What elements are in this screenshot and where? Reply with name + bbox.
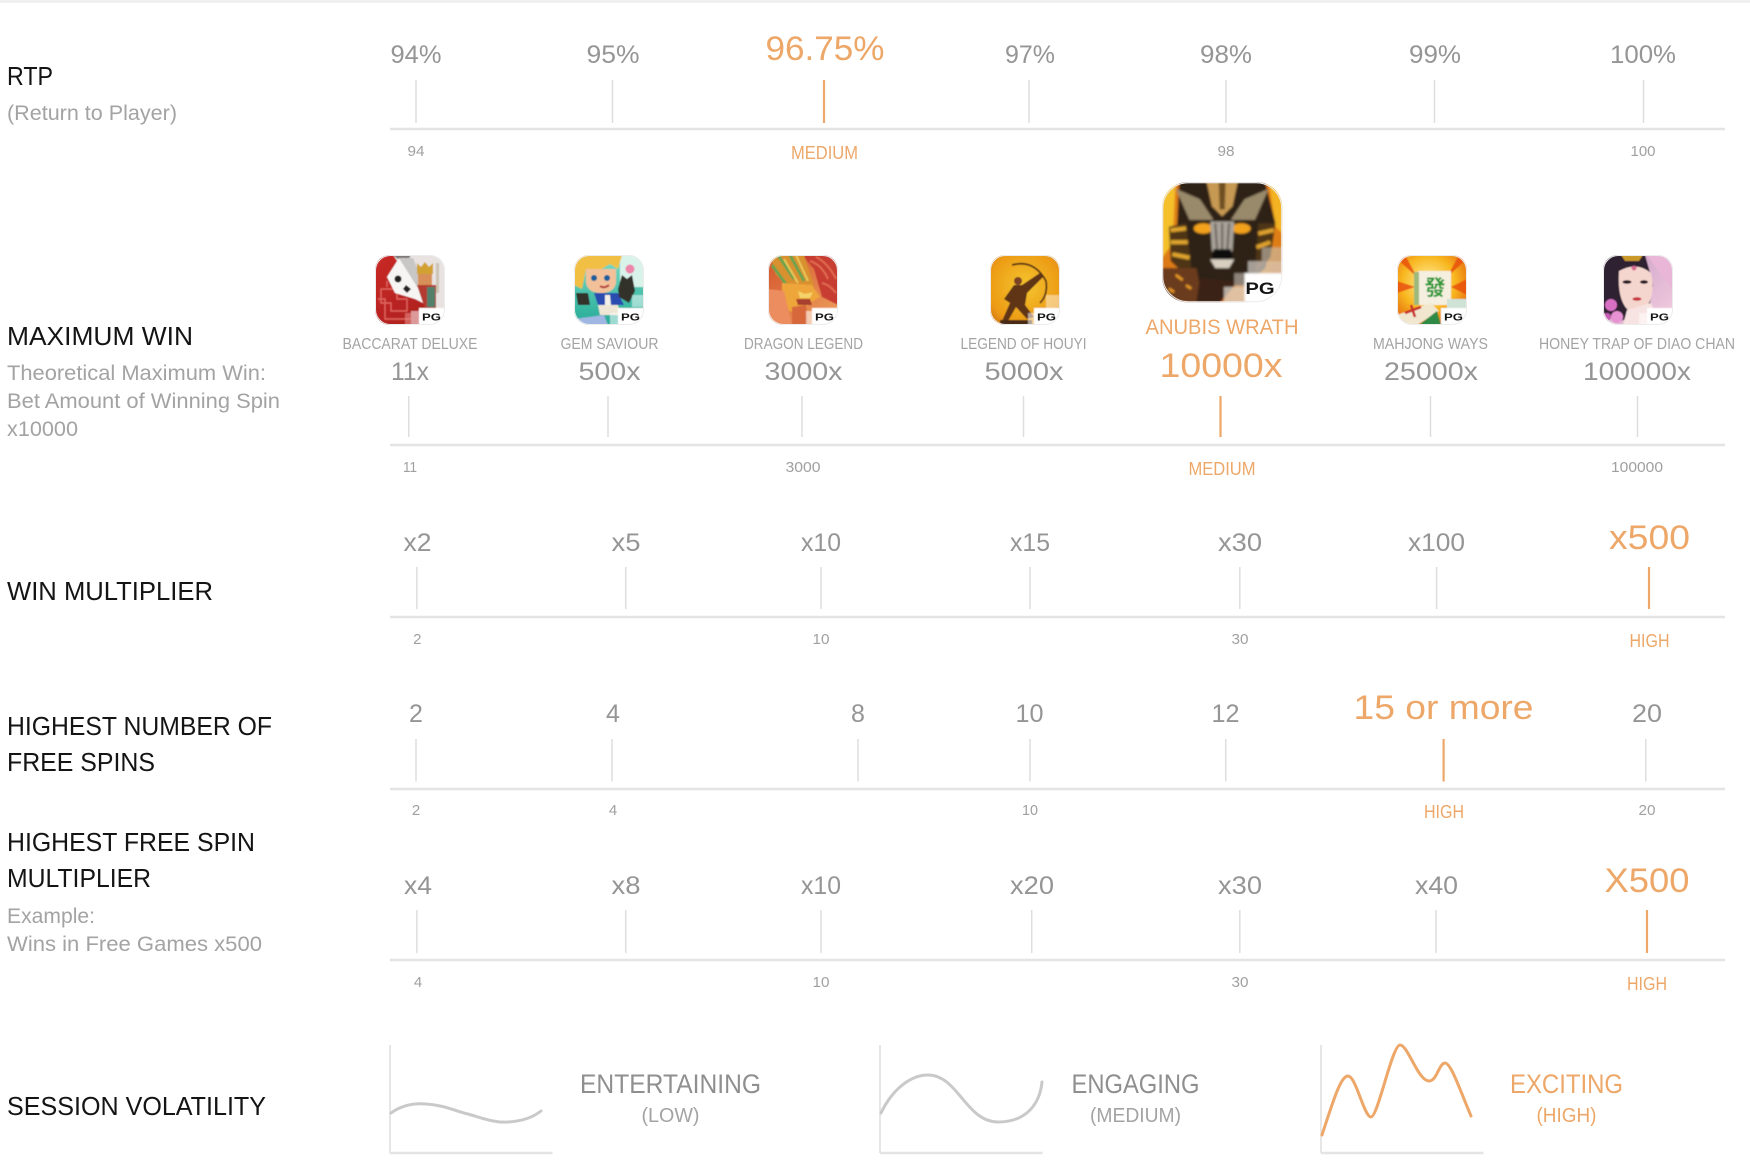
scale sublabels: MEDIUM: [1188, 459, 1256, 479]
description: theoretical maximum win: Theoretical Maximum Win:: [7, 362, 266, 385]
scale values: x10: [801, 872, 841, 900]
scale values: x2: [404, 529, 432, 557]
icon: Mahjong Ways: 發: [1424, 272, 1446, 302]
row: maximum win: [7, 182, 1735, 479]
icon: Dragon Legend: [768, 255, 838, 325]
win values: 100000x: [1583, 358, 1692, 386]
icon: Mahjong Ways: [1397, 255, 1467, 325]
row: RTP: [7, 30, 1725, 163]
scale sublabels: 20: [1638, 802, 1656, 819]
label: entertaining: (LOW): [642, 1105, 700, 1127]
scale sublabels: 10: [812, 631, 830, 648]
scale values: 97%: [1005, 41, 1055, 69]
game names: LEGEND OF HOUYI: [960, 336, 1086, 353]
scale ticks and axis: [390, 910, 1725, 960]
scale values: x40: [1415, 872, 1458, 900]
scale values: x8: [612, 872, 640, 900]
icon: Honey Trap of Diao Chan: PG: [1650, 312, 1669, 324]
scale values: 4: [606, 700, 620, 728]
scale sublabels: 11: [403, 459, 417, 476]
scale values: x20: [1010, 872, 1054, 900]
scale values: 15 or more: [1354, 689, 1534, 727]
scale values: 95%: [586, 41, 640, 69]
label: entertaining: ENTERTAINING: [580, 1069, 761, 1099]
scale sublabels: 4: [609, 802, 617, 819]
label: engaging: [1072, 1069, 1200, 1127]
icon: Legend of Houyi: PG: [1037, 312, 1056, 324]
icon: Legend of Houyi: [990, 255, 1060, 325]
scale ticks and axis: [390, 739, 1725, 789]
scale ticks and axis: [390, 567, 1725, 617]
scale sublabels: 4: [414, 974, 422, 991]
scale sublabels: 94: [408, 143, 424, 160]
scale ticks and axis: [390, 396, 1725, 445]
scale values: x30: [1218, 872, 1262, 900]
scale values: 96.75%: [766, 30, 884, 68]
scale sublabels: 10: [1022, 802, 1038, 819]
scale values: x15: [1010, 529, 1050, 557]
scale values: x100: [1408, 529, 1465, 557]
scale sublabels: 30: [1232, 631, 1248, 648]
scale ticks and axis: [390, 80, 1725, 129]
description: theoretical maximum win: x10000: [7, 418, 78, 441]
heading: RTP: RTP: [7, 61, 53, 91]
scale sublabels: MEDIUM: [791, 143, 858, 163]
scale values: 99%: [1409, 41, 1461, 69]
description: example: Wins in Free Games x500: [7, 933, 262, 956]
label: entertaining: [580, 1069, 761, 1127]
scale sublabels: 100: [1630, 143, 1656, 160]
description: theoretical maximum win: Bet Amount of Winning Spin: [7, 390, 280, 413]
scale sublabels: HIGH: [1424, 802, 1464, 822]
scale values: [404, 519, 1690, 557]
scale values: 20: [1632, 700, 1662, 728]
label: exciting: [1510, 1069, 1623, 1127]
scale sublabels: 30: [1232, 974, 1248, 991]
heading: highest number of free spins: FREE SPINS: [7, 747, 155, 777]
scale sublabels: [403, 459, 1663, 479]
icon: Baccarat Deluxe: PG: [422, 312, 441, 324]
win values: 3000x: [764, 358, 843, 386]
heading: highest free spin multiplier: MULTIPLIER: [7, 863, 151, 893]
game names: BACCARAT DELUXE: [342, 336, 478, 353]
scale values: x4: [404, 872, 432, 900]
label: exciting: EXCITING: [1510, 1069, 1623, 1099]
win values: 5000x: [984, 358, 1064, 386]
scale values: x10: [801, 529, 841, 557]
icon: Mahjong Ways: PG: [1444, 312, 1463, 324]
game names: DRAGON LEGEND: [744, 336, 863, 353]
scale sublabels: 2: [413, 631, 421, 648]
scale values: x30: [1218, 529, 1262, 557]
icon: Anubis Wrath: [1162, 182, 1282, 302]
game names: [342, 316, 1735, 353]
description: example: Example:: [7, 905, 95, 928]
scale sublabels: [413, 631, 1669, 651]
scale sublabels: HIGH: [1627, 974, 1667, 994]
icon: Baccarat Deluxe: [375, 255, 445, 325]
row: highest free spin multiplier: [7, 827, 1725, 994]
win values: 25000x: [1384, 358, 1479, 386]
game names: MAHJONG WAYS: [1373, 336, 1488, 353]
scale values: [409, 689, 1662, 728]
scale sublabels: HIGH: [1630, 631, 1670, 651]
heading: maximum win: MAXIMUM WIN: [7, 321, 193, 351]
icon: Gem Saviour: [574, 255, 644, 325]
icon: Dragon Legend: PG: [815, 312, 834, 324]
icon: Anubis Wrath: PG: [1245, 280, 1275, 298]
row: session volatility: [7, 1045, 1623, 1153]
description: return to player: (Return to Player): [7, 102, 177, 125]
label: engaging: (MEDIUM): [1090, 1105, 1181, 1127]
game names: HONEY TRAP OF DIAO CHAN: [1539, 336, 1735, 353]
scale sublabels: [408, 143, 1656, 163]
win values: [391, 347, 1692, 386]
scale values: 8: [851, 700, 865, 728]
scale values: 2: [409, 700, 423, 728]
scale sublabels: 10: [812, 974, 830, 991]
heading: highest free spin multiplier: HIGHEST FREE SPIN: [7, 827, 255, 857]
heading: win multiplier: WIN MULTIPLIER: [7, 576, 213, 606]
chart: high volatility curve: [1321, 1045, 1484, 1153]
chart: medium volatility curve: [880, 1045, 1042, 1153]
game names: GEM SAVIOUR: [560, 336, 658, 353]
label: exciting: (HIGH): [1536, 1105, 1596, 1127]
scale sublabels: 2: [412, 802, 420, 819]
scale values: [390, 30, 1676, 69]
scale values: X500: [1604, 862, 1690, 900]
description: theoretical maximum win: [7, 362, 280, 441]
game names: ANUBIS WRATH: [1146, 316, 1298, 339]
description: example: [7, 905, 262, 956]
heading: highest free spin multiplier: [7, 827, 255, 893]
heading: session volatility: SESSION VOLATILITY: [7, 1091, 266, 1121]
icon: Gem Saviour: PG: [621, 312, 640, 324]
scale values: x5: [612, 529, 640, 557]
scale values: 12: [1212, 700, 1240, 728]
scale values: 94%: [390, 41, 442, 69]
scale sublabels: 98: [1218, 143, 1234, 160]
scale sublabels: [414, 974, 1667, 994]
win values: 500x: [578, 358, 641, 386]
scale sublabels: [412, 802, 1656, 822]
icon: Honey Trap of Diao Chan: [1603, 255, 1673, 325]
heading: highest number of free spins: HIGHEST NUMBER OF: [7, 711, 272, 741]
scale values: 98%: [1200, 41, 1252, 69]
chart: low volatility curve: [390, 1045, 552, 1153]
scale sublabels: 3000: [786, 459, 820, 476]
win values: 11x: [391, 358, 429, 386]
top edge band: [0, 0, 1750, 3]
scale values: 10: [1016, 700, 1044, 728]
row: win multiplier: [7, 519, 1725, 651]
row: highest number of free spins: [7, 689, 1725, 822]
scale sublabels: 100000: [1611, 459, 1663, 476]
win values: 10000x: [1160, 347, 1282, 385]
scale values: x500: [1609, 519, 1690, 557]
label: engaging: ENGAGING: [1072, 1069, 1200, 1099]
scale values: 100%: [1610, 41, 1676, 69]
scale values: [404, 862, 1690, 900]
heading: highest number of free spins: [7, 711, 272, 777]
